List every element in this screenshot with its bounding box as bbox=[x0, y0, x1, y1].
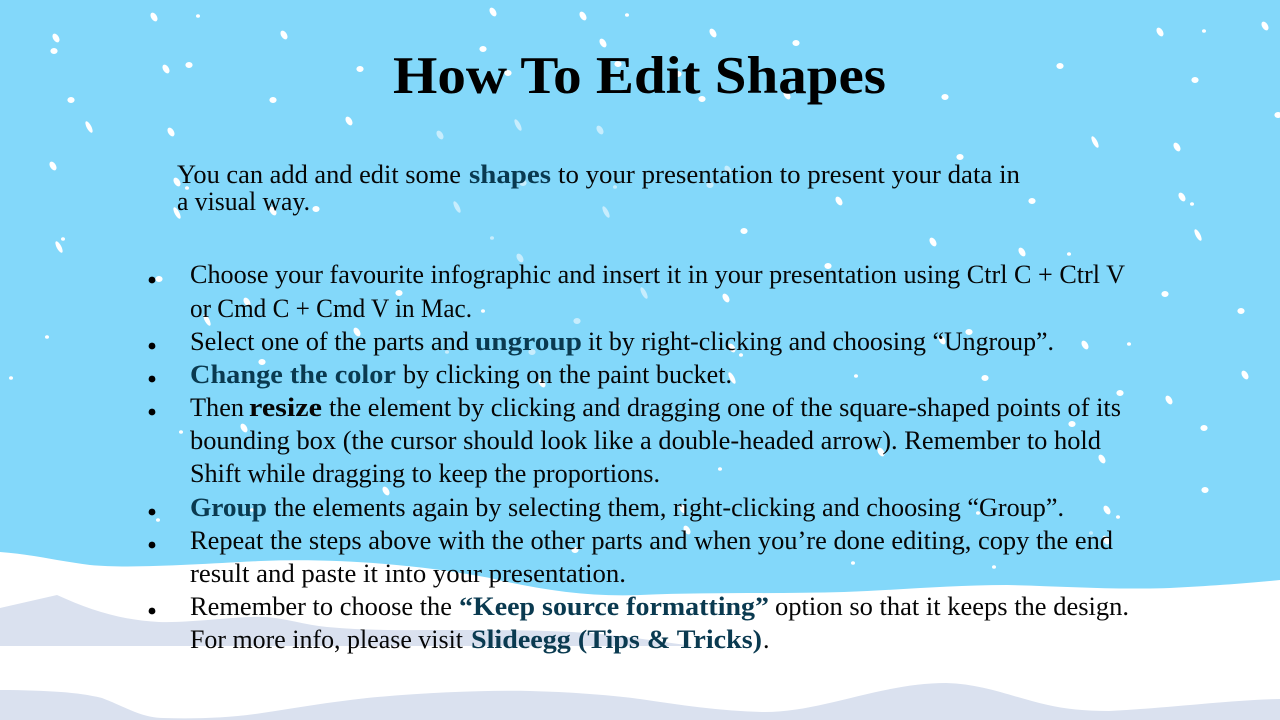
step 7: keep source formatting: Remember to choose the bbox=[190, 592, 452, 621]
step 7: keep source formatting: option so that it keeps the design. bbox=[775, 592, 1129, 621]
falling snowflakes bbox=[9, 6, 1280, 569]
step 2: ungroup: Select one of the parts and bbox=[190, 327, 469, 356]
step 4: resize: bounding box (the cursor should look like a double-headed arrow). Remember to hold bbox=[190, 426, 1101, 455]
step 5: group: Group bbox=[190, 493, 267, 522]
bullet list bbox=[149, 260, 1129, 654]
step 1: insert infographic: or Cmd C + Cmd V in Mac. bbox=[190, 294, 472, 323]
step 7: keep source formatting: “Keep source formatting” bbox=[459, 592, 769, 621]
intro paragraph: a visual way. bbox=[177, 187, 310, 216]
step 4: resize: Shift while dragging to keep the proportions. bbox=[190, 459, 660, 488]
step 4: resize: resize bbox=[249, 393, 322, 422]
step 2: ungroup: it by right-clicking and choosing “Ungroup”. bbox=[588, 327, 1054, 356]
step 4: resize bbox=[149, 393, 1121, 488]
step 7: keep source formatting: . bbox=[763, 625, 770, 654]
step 7: keep source formatting: For more info, please visit bbox=[190, 625, 464, 654]
intro paragraph: shapes bbox=[469, 160, 551, 189]
step 6: repeat bbox=[149, 526, 1113, 588]
step 2: ungroup: ungroup bbox=[475, 327, 582, 356]
step 3: change the color: by clicking on the paint bucket. bbox=[403, 360, 732, 389]
step 4: resize: the element by clicking and dragging one of the square-shaped points of its bbox=[329, 393, 1121, 422]
step 6: repeat: result and paste it into your presentation. bbox=[190, 559, 626, 588]
step 3: change the color bbox=[149, 360, 732, 389]
foreground snow hill bbox=[0, 683, 1280, 720]
step 5: group: the elements again by selecting them, right-clicking and choosing “Group”. bbox=[274, 493, 1064, 522]
step 2: ungroup bbox=[149, 327, 1054, 356]
intro paragraph: You can add and edit some bbox=[177, 160, 461, 189]
step 7: keep source formatting: Slideegg (Tips & Tricks) bbox=[471, 625, 762, 654]
intro paragraph bbox=[177, 160, 1020, 216]
distant snow hill bbox=[0, 595, 693, 646]
snowy ground bbox=[0, 552, 1280, 720]
intro paragraph: to your presentation to present your data in bbox=[558, 160, 1020, 189]
step 3: change the color: Change the color bbox=[190, 360, 396, 389]
step 7: keep source formatting bbox=[149, 592, 1129, 654]
step 1: insert infographic: Choose your favourite infographic and insert it in your presentation using Ctrl C + Ctrl V bbox=[190, 260, 1125, 289]
title: How To Edit Shapes bbox=[393, 47, 886, 105]
step 6: repeat: Repeat the steps above with the other parts and when you’re done editing, copy the end bbox=[190, 526, 1113, 555]
step 1: insert infographic bbox=[149, 260, 1125, 323]
step 4: resize: Then bbox=[190, 393, 244, 422]
